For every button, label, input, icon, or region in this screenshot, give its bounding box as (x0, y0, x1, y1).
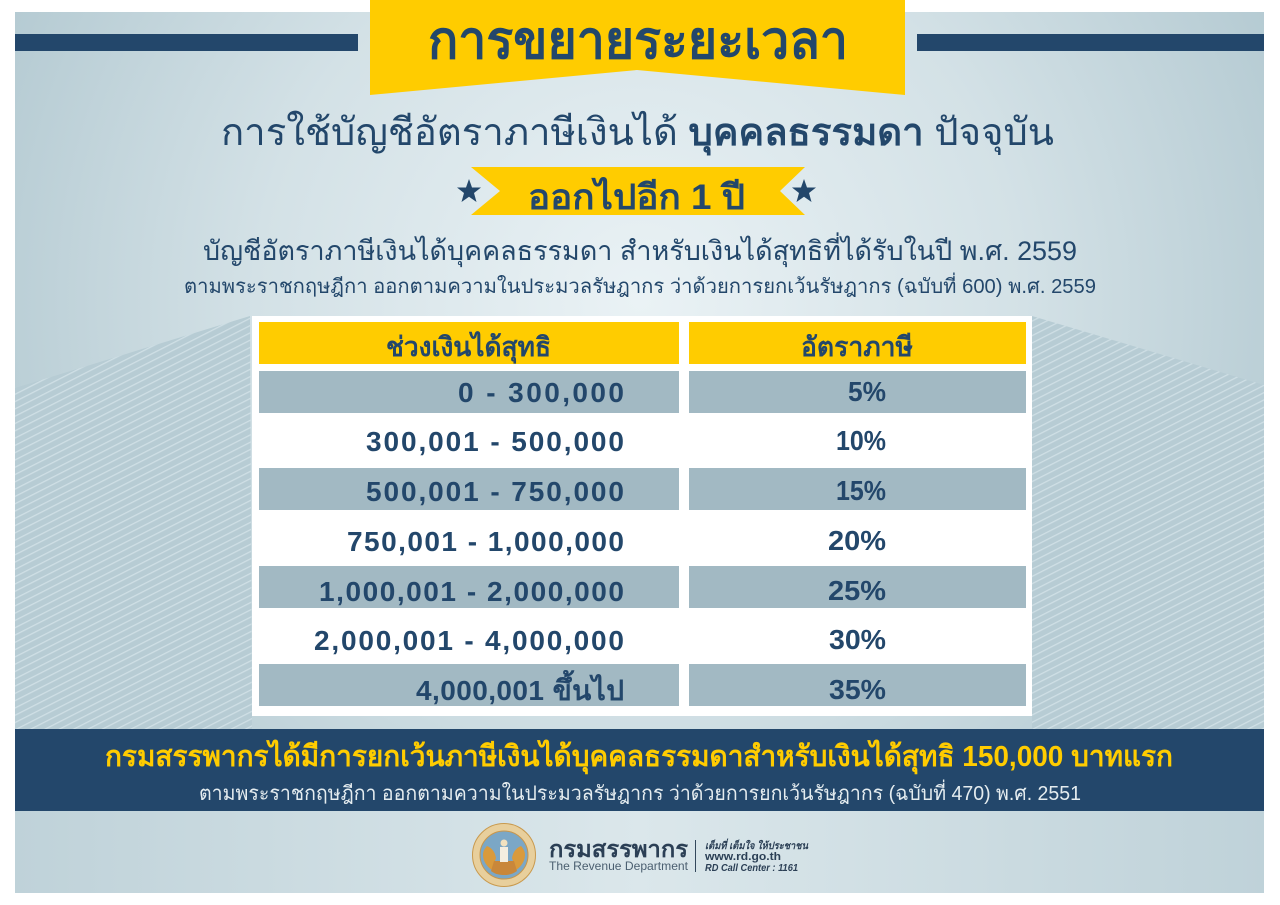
table header: tax rate (689, 322, 1026, 364)
row 2 (366, 425, 886, 457)
icon: left star (457, 179, 481, 202)
contact block: เต็มที่ เต็มใจ ให้ประชาชน (705, 838, 809, 852)
row 5: 1,000,001 - 2,000,000 (319, 576, 624, 607)
striped hill: right (1032, 316, 1264, 729)
row 5: 25% (828, 575, 886, 606)
row 1: 0 - 300,000 (458, 377, 624, 408)
striped hill: left (15, 316, 252, 729)
title banner (370, 0, 905, 95)
table header: income range: ช่วงเงินได้สุทธิ (386, 331, 551, 364)
footer divider (695, 840, 696, 872)
row 4 (347, 525, 886, 557)
table header: tax rate: อัตราภาษี (801, 332, 913, 362)
header bar: left (15, 34, 358, 51)
row 3: 500,001 - 750,000 (366, 476, 624, 507)
department name: กรมสรรพากร (549, 836, 689, 862)
row 5 (259, 566, 1026, 608)
tax rate table (252, 316, 1032, 716)
website: www.rd.go.th (704, 851, 781, 863)
legal reference line: ตามพระราชกฤษฎีกา ออกตามความในประมวลรัษฎากร ว่าด้วยการยกเว้นรัษฎากร (ฉบับที่ 600) พ.ศ. 2559 (184, 272, 1096, 298)
subtitle: การใช้บัญชีอัตราภาษีเงินได้ บุคคลธรรมดา ปัจจุบัน (221, 111, 1054, 156)
exemption band (15, 729, 1264, 811)
row 3: 15% (836, 475, 886, 506)
row 7 (259, 664, 1026, 706)
exemption headline: กรมสรรพากรได้มีการยกเว้นภาษีเงินได้บุคคลธรรมดาสำหรับเงินได้สุทธิ 150,000 บาทแรก (105, 739, 1173, 774)
row 7: 4,000,001 ขึ้นไป (416, 669, 624, 706)
row 1: 5% (848, 376, 886, 407)
header bar: right (917, 34, 1264, 51)
row 2: 300,001 - 500,000 (366, 426, 624, 457)
icon: Revenue Department seal (472, 824, 536, 886)
ribbon text: ออกไปอีก 1 ปี (528, 176, 745, 217)
row 6: 2,000,001 - 4,000,000 (314, 625, 624, 656)
english name: The Revenue Department (549, 859, 689, 873)
row 4: 750,001 - 1,000,000 (347, 526, 624, 557)
description line: บัญชีอัตราภาษีเงินได้บุคคลธรรมดา สำหรับเงินได้สุทธิที่ได้รับในปี พ.ศ. 2559 (203, 232, 1077, 268)
panel: footer background (15, 811, 1264, 893)
row 6: 30% (829, 624, 886, 655)
row 2: 10% (836, 425, 886, 456)
row 1 (259, 371, 1026, 413)
title: การขยายระยะเวลา (428, 12, 848, 70)
exemption legal reference: ตามพระราชกฤษฎีกา ออกตามความในประมวลรัษฎากร ว่าด้วยการยกเว้นรัษฎากร (ฉบับที่ 470) พ.ศ. 2551 (199, 779, 1081, 805)
row 7: 35% (829, 674, 886, 705)
row 6 (314, 624, 886, 656)
row 4: 20% (828, 525, 886, 556)
call center: RD Call Center : 1161 (705, 863, 798, 874)
row 3 (259, 468, 1026, 510)
contact block (704, 838, 809, 874)
icon: right star (792, 179, 816, 202)
table header: income range (259, 322, 679, 364)
ribbon: one more year (471, 167, 805, 217)
department name (549, 836, 689, 873)
